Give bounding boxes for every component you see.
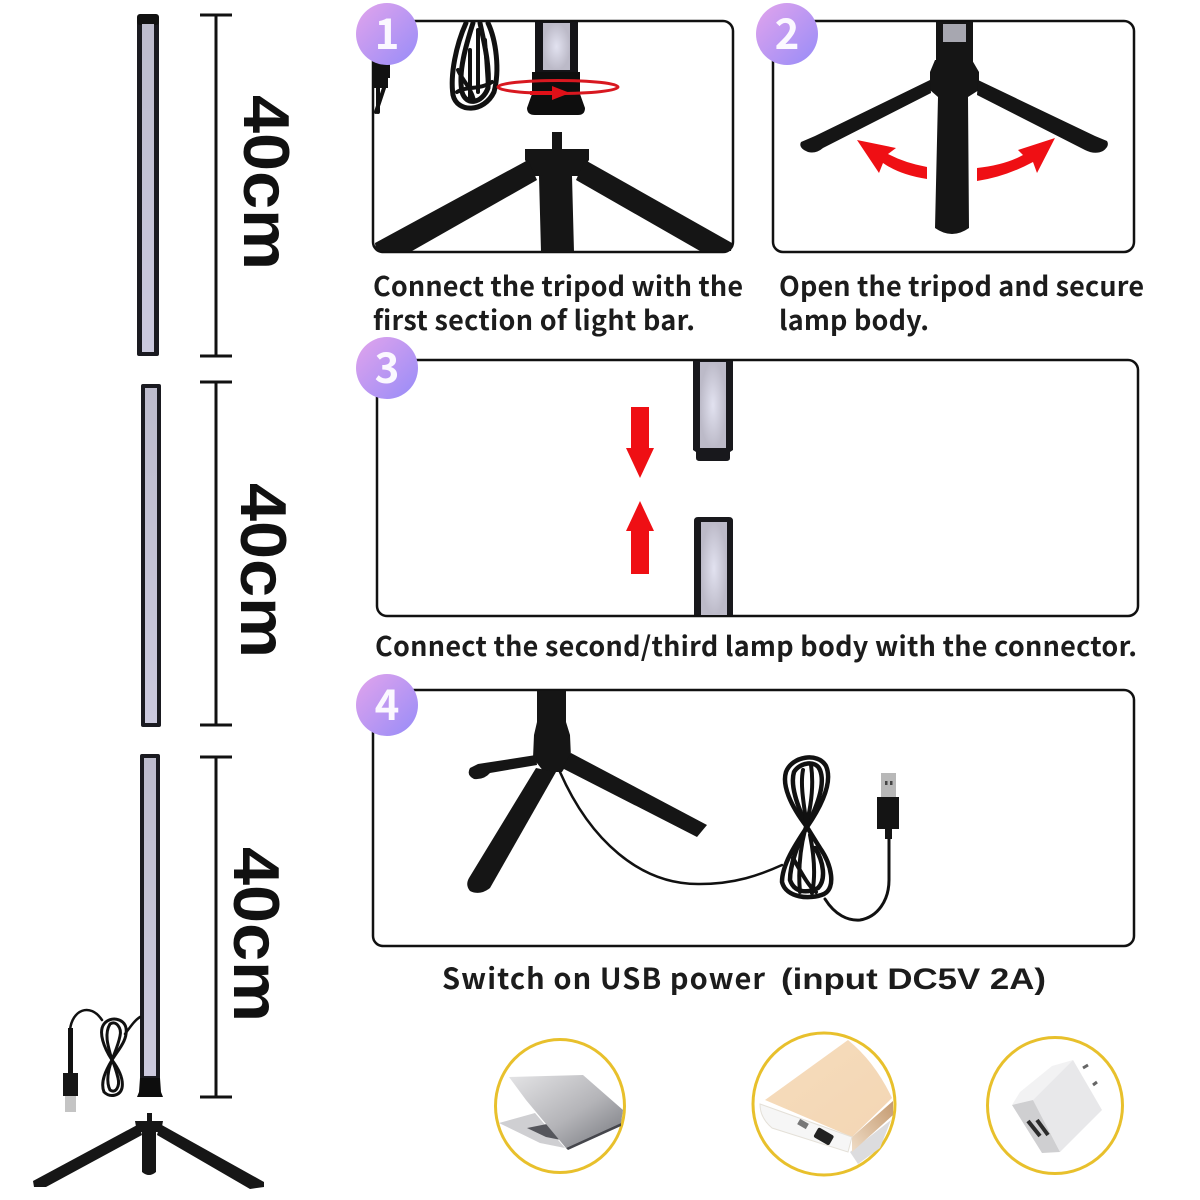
label: 40cm first section: 40cm bbox=[230, 95, 303, 270]
badge 4 bbox=[356, 672, 418, 736]
panel: step 1 bbox=[372, 21, 733, 252]
dimension line 2 bbox=[200, 382, 232, 725]
badge 3: 3 bbox=[375, 335, 399, 396]
dimension line 1 bbox=[200, 15, 232, 356]
step 3 red arrow down bbox=[626, 407, 654, 478]
light bar section 1 bbox=[137, 14, 159, 356]
panel: step 4 bbox=[373, 690, 1134, 946]
badge 1: 1 bbox=[375, 1, 399, 62]
panel: step 2 bbox=[773, 21, 1134, 252]
step 3 red arrow up bbox=[626, 501, 654, 574]
caption step 2: Open the tripod and secure bbox=[779, 265, 1144, 304]
caption step 4: (input DC5V 2A) bbox=[781, 963, 1046, 996]
badge 3 bbox=[356, 335, 418, 399]
badge 1 bbox=[356, 1, 418, 65]
badge 2: 2 bbox=[775, 1, 799, 62]
panel: step 3 bbox=[377, 360, 1138, 616]
step 2 red arrow left bbox=[857, 140, 927, 179]
caption step 2 bbox=[779, 265, 1144, 338]
step 3 lower lamp section bbox=[694, 517, 733, 615]
step 4 frame bbox=[373, 690, 1134, 946]
badge 4: 4 bbox=[375, 672, 399, 733]
tripod base bbox=[33, 1113, 264, 1189]
step 3 upper lamp section bbox=[693, 361, 733, 461]
step 1 tripod bbox=[375, 132, 732, 252]
step 4 tripod bbox=[467, 691, 707, 893]
step 4 cable coil bbox=[560, 757, 889, 920]
step 1 USB connector bbox=[372, 62, 390, 112]
icon: wall charger bbox=[988, 1038, 1122, 1174]
caption step 1: Connect the tripod with the bbox=[373, 265, 743, 304]
light bar section 2 bbox=[141, 384, 161, 727]
step 1 red rotation arrow bbox=[498, 80, 618, 100]
step 2 frame bbox=[773, 21, 1134, 252]
step 2 tripod and lamp bbox=[800, 22, 1108, 234]
badge 2 bbox=[756, 1, 818, 65]
label: 40cm third section: 40cm bbox=[220, 847, 293, 1022]
caption step 1 bbox=[373, 265, 743, 338]
step 1 frame bbox=[373, 21, 733, 252]
dimension line 3 bbox=[200, 757, 232, 1097]
step 1 lamp section bbox=[527, 22, 585, 115]
icon: power bank bbox=[753, 1033, 895, 1175]
light bar section 3 with base bbox=[137, 754, 163, 1097]
step 4 USB plug bbox=[877, 773, 899, 839]
step 1 cable coil bbox=[452, 23, 497, 108]
step 2 red arrow right bbox=[977, 138, 1055, 181]
caption step 4 bbox=[442, 956, 1046, 998]
step 3 frame bbox=[377, 360, 1138, 616]
caption step 4: Switch on USB power bbox=[442, 956, 765, 998]
icon: laptop bbox=[496, 1040, 624, 1172]
caption step 1: first section of light bar. bbox=[373, 299, 695, 338]
caption step 3: Connect the second/third lamp body with the connector. bbox=[375, 625, 1137, 664]
USB cable of assembled lamp bbox=[63, 1010, 140, 1112]
caption step 2: lamp body. bbox=[779, 299, 929, 338]
label: 40cm second section: 40cm bbox=[227, 483, 300, 658]
